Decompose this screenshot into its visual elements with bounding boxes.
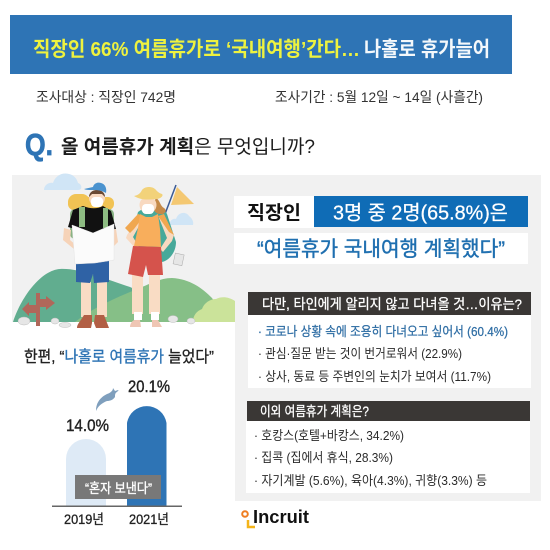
arms bbox=[126, 215, 144, 249]
backpack bbox=[70, 209, 114, 239]
reason 1: · 코로나 상황 속에 조용히 다녀오고 싶어서 (60.4%) bbox=[258, 324, 508, 339]
backpack bbox=[131, 207, 176, 262]
flag pole and flag bbox=[165, 185, 176, 214]
bar 2021 bbox=[127, 406, 166, 506]
value 14.0%: 14.0% bbox=[66, 416, 109, 435]
plan 2: · 집콕 (집에서 휴식, 28.3%) bbox=[254, 450, 393, 465]
arms bbox=[63, 228, 77, 249]
plan 3: · 자기계발 (5.6%), 육아(4.3%), 귀향(3.3%) 등 bbox=[254, 473, 487, 488]
question heading: Q. bbox=[25, 127, 53, 162]
orange top bbox=[134, 214, 161, 247]
logo: Incruit: Incruit bbox=[253, 506, 309, 527]
label: alone: “혼자 보낸다” bbox=[85, 481, 152, 496]
reason 2: · 관심·질문 받는 것이 번거로워서 (22.9%) bbox=[258, 346, 462, 361]
reason 3: · 상사, 동료 등 주변인의 눈치가 보여서 (11.7%) bbox=[258, 369, 491, 384]
survey period: 조사기간 : 5월 12일 ~ 14일 (사흘간) bbox=[275, 89, 483, 105]
legs bbox=[132, 272, 143, 314]
panel: other plans: 이외 여름휴가 계획은? bbox=[260, 404, 369, 419]
shirt bbox=[68, 206, 116, 242]
title banner: 직장인 66% 여름휴가로 ‘국내여행’간다… bbox=[33, 38, 360, 61]
boots bbox=[77, 315, 92, 328]
bar chart bbox=[52, 377, 182, 527]
jacket on shoulders bbox=[125, 214, 144, 233]
map bbox=[72, 224, 114, 264]
heading: solo vacation: 한편, “나홀로 여름휴가 늘었다” bbox=[24, 348, 214, 366]
title banner bbox=[10, 15, 512, 74]
title banner: 나홀로 휴가늘어 bbox=[364, 38, 490, 61]
value 20.1%: 20.1% bbox=[128, 377, 170, 396]
icon: cup bbox=[173, 253, 184, 266]
axis label 2021: 2021년 bbox=[129, 512, 169, 527]
panel: reasons: 다만, 타인에게 알리지 않고 다녀올 것…이유는? bbox=[262, 296, 522, 312]
callout: domestic travel: “여름휴가 국내여행 계획했다” bbox=[257, 238, 505, 261]
icon: signpost bbox=[22, 293, 55, 326]
callout: 3 in 2: 3명 중 2명(65.8%)은 bbox=[333, 202, 508, 224]
ground stones bbox=[18, 316, 195, 328]
icon: bush bbox=[193, 297, 235, 322]
woman bbox=[125, 185, 194, 327]
red shorts bbox=[128, 246, 163, 277]
straw hat bbox=[134, 187, 163, 200]
mask bbox=[142, 204, 154, 214]
panel: gray background bbox=[12, 175, 541, 501]
question heading bbox=[25, 127, 315, 162]
hills bbox=[13, 269, 228, 322]
callout: 3 in 2 bbox=[234, 196, 528, 228]
bar 2019 bbox=[66, 439, 106, 506]
icon: clouds bbox=[44, 173, 193, 225]
head bbox=[89, 190, 105, 206]
illustration: hikers bbox=[13, 173, 235, 328]
question heading: 올 여름휴가 계획은 무엇입니까? bbox=[61, 136, 315, 158]
plan 1: · 호캉스(호텔+바캉스, 34.2%) bbox=[254, 428, 404, 443]
shorts bbox=[76, 260, 109, 283]
blue cap bbox=[84, 183, 106, 193]
panel: reasons bbox=[248, 292, 531, 388]
survey target: 조사대상 : 직장인 742명 bbox=[36, 89, 176, 105]
head bbox=[140, 196, 156, 214]
axis label 2019: 2019년 bbox=[64, 512, 104, 527]
panel: other plans bbox=[246, 401, 530, 493]
arrow: upward trend bbox=[96, 388, 118, 411]
man bbox=[63, 183, 118, 328]
bedroll bbox=[68, 197, 114, 210]
hair bbox=[152, 198, 166, 214]
callout: domestic travel bbox=[234, 233, 528, 264]
callout: 3 in 2: 직장인 bbox=[247, 202, 301, 224]
label: alone bbox=[75, 475, 161, 499]
mask bbox=[91, 197, 103, 207]
